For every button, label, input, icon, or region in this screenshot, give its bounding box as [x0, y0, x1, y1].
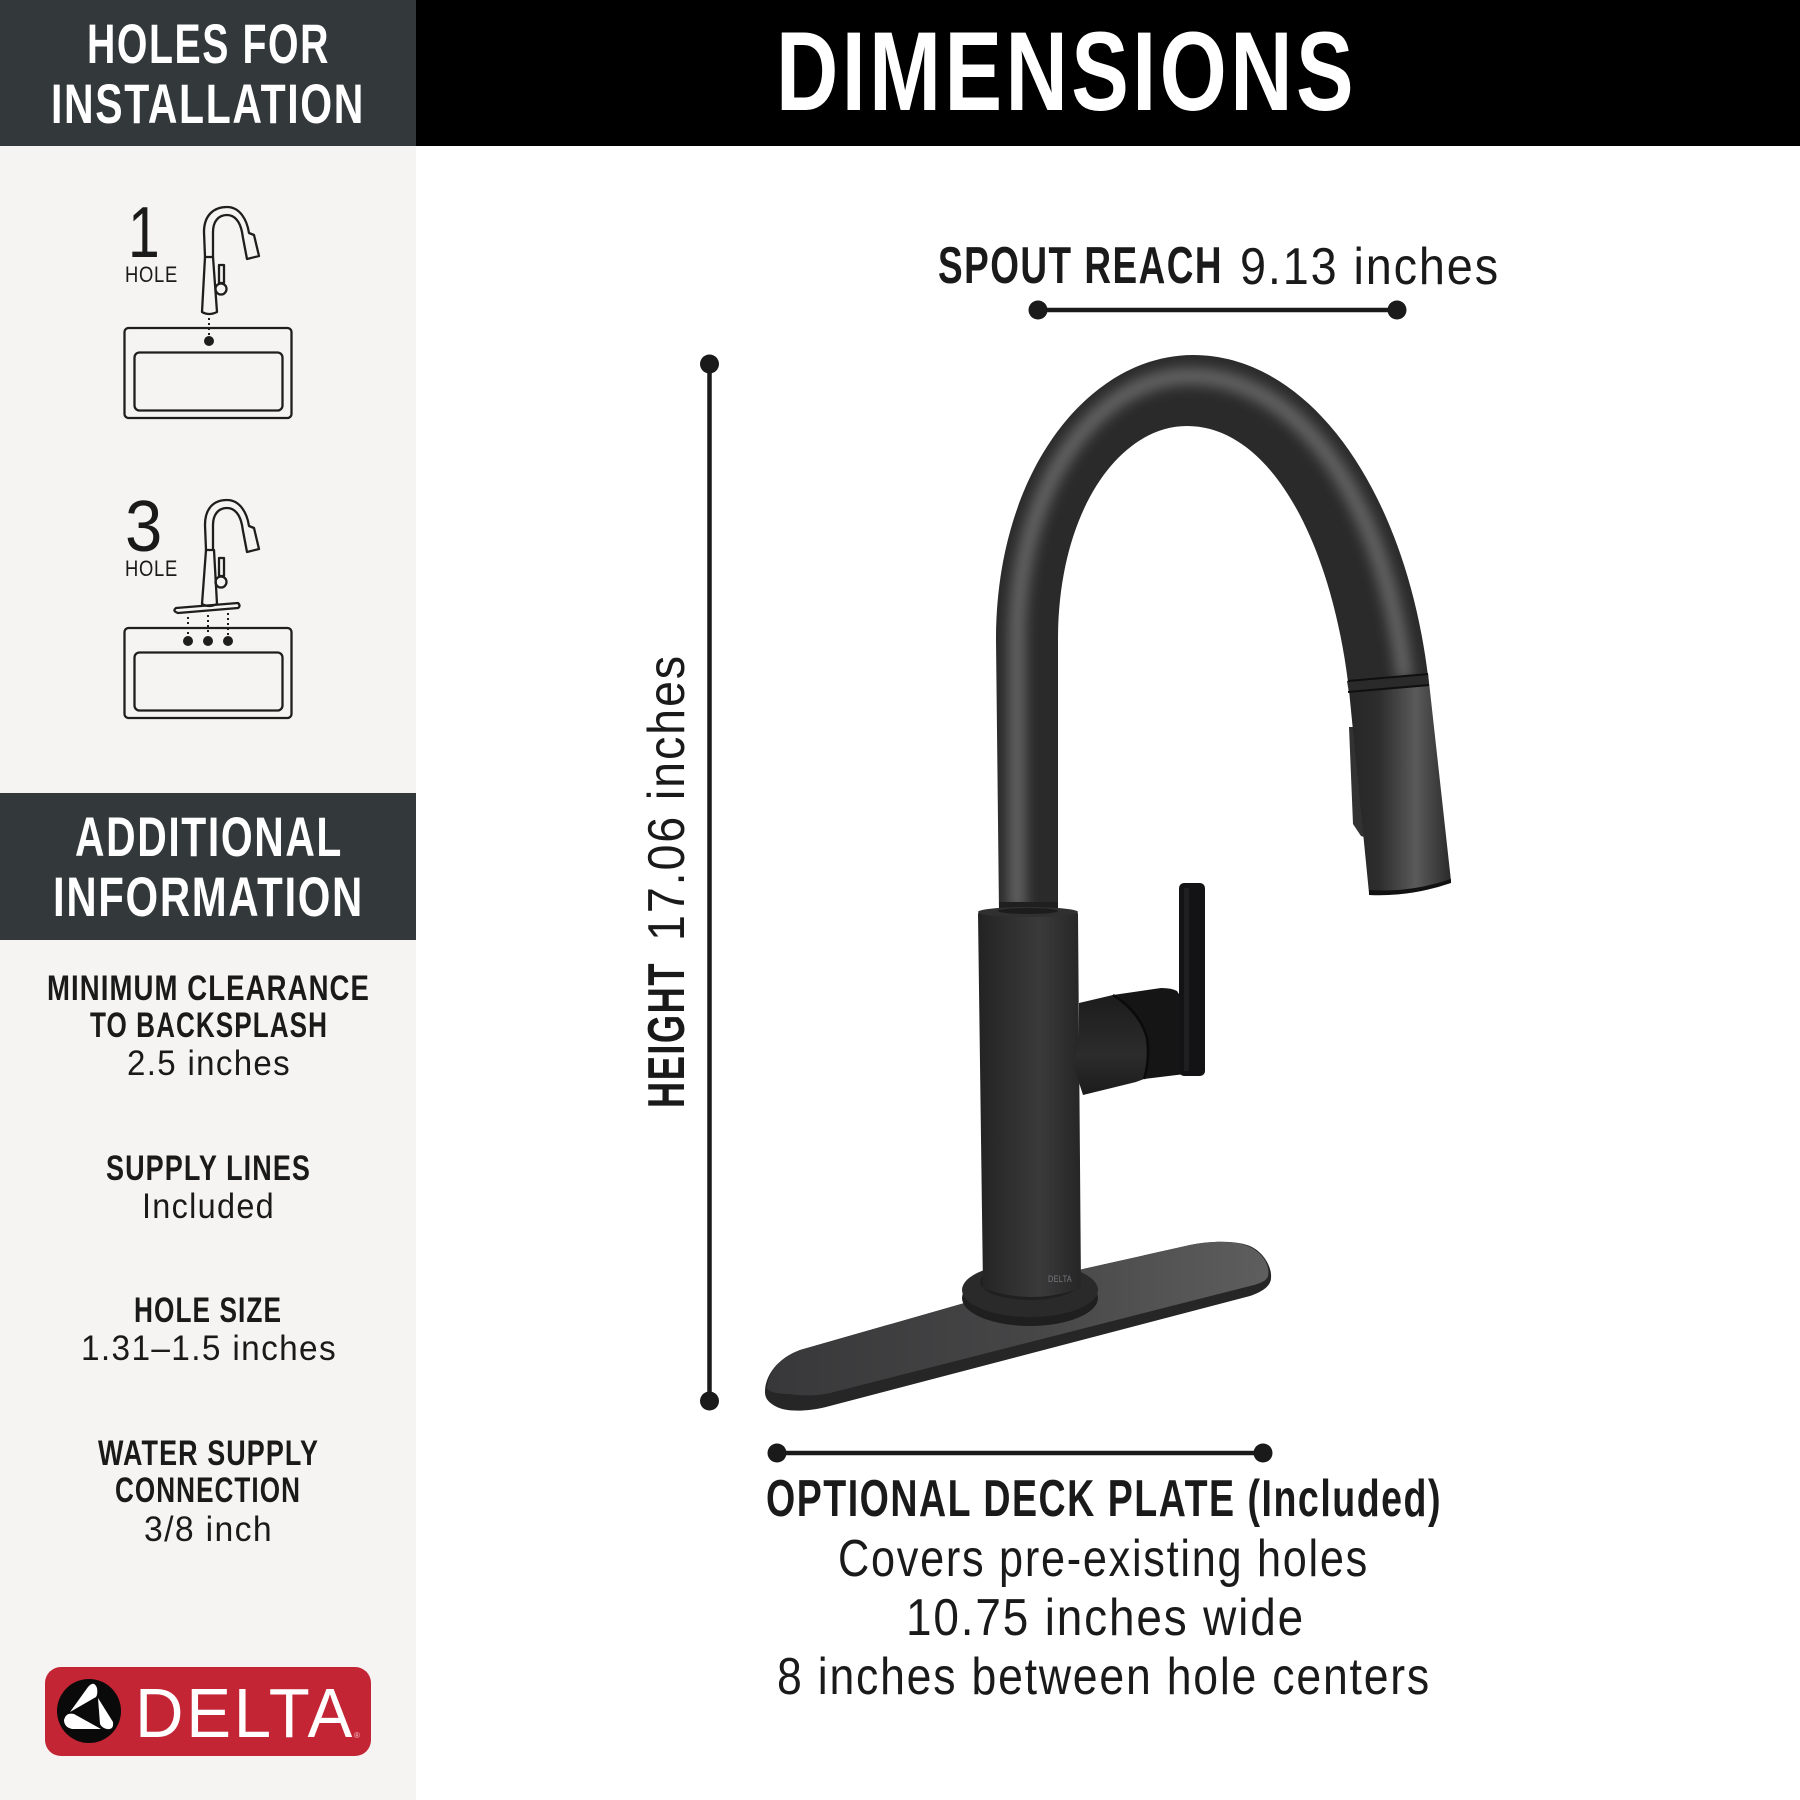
faucet pull-down head [1347, 673, 1451, 895]
info: hole size: 1.31–1.5 inches [81, 1329, 337, 1368]
info: supply lines: SUPPLY LINES [106, 1149, 311, 1188]
header bar: additional information: INFORMATION [53, 865, 364, 928]
icon: three hole installation [124, 487, 292, 718]
faucet deck plate [765, 1242, 1271, 1411]
header bar: additional information: ADDITIONAL [75, 805, 343, 868]
info: supply lines: Included [142, 1187, 275, 1226]
deck plate dimension: OPTIONAL DECK PLATE (Included) [766, 1470, 1442, 1528]
icon: one hole installation [124, 193, 292, 418]
deck plate dimension: 10.75 inches wide [906, 1589, 1305, 1647]
sidebar background [0, 146, 416, 1800]
header bar: additional information [0, 793, 416, 940]
faucet handle [1074, 883, 1205, 1095]
height dimension [638, 354, 719, 1410]
info: hole size [81, 1291, 337, 1368]
logo: Delta: DELTA [135, 1674, 355, 1752]
info: water supply connection [98, 1434, 319, 1549]
info: minimum clearance [47, 969, 370, 1083]
icon: one hole installation: 1 [128, 193, 162, 273]
info: supply lines [106, 1149, 311, 1226]
header bar: holes for installation: HOLES FOR [87, 12, 330, 75]
info: minimum clearance: TO BACKSPLASH [90, 1006, 328, 1045]
info: minimum clearance: MINIMUM CLEARANCE [47, 969, 370, 1008]
spout reach dimension: SPOUT REACH [938, 237, 1223, 295]
height dimension: 17.06 inches [638, 654, 696, 941]
info: minimum clearance: 2.5 inches [127, 1044, 291, 1083]
icon: three hole installation: 3 [125, 487, 165, 567]
header bar: dimensions title: DIMENSIONS [776, 9, 1357, 134]
faucet body: DELTA [1048, 1274, 1072, 1284]
faucet spout [996, 355, 1428, 908]
header bar: dimensions title [416, 0, 1800, 146]
height dimension: HEIGHT [638, 962, 696, 1108]
spout reach dimension [938, 237, 1500, 320]
info: water supply connection: 3/8 inch [144, 1510, 273, 1549]
info: water supply connection: CONNECTION [115, 1471, 301, 1510]
icon: one hole installation: HOLE [125, 262, 178, 287]
info: water supply connection: WATER SUPPLY [98, 1434, 319, 1473]
spout reach dimension: 9.13 inches [1240, 238, 1500, 296]
deck plate dimension: Covers pre-existing holes [838, 1530, 1369, 1588]
deck plate dimension: 8 inches between hole centers [777, 1648, 1431, 1706]
header bar: holes for installation [0, 0, 416, 146]
faucet flange [962, 1263, 1098, 1326]
info: hole size: HOLE SIZE [134, 1291, 282, 1330]
header bar: holes for installation: INSTALLATION [51, 72, 365, 135]
faucet body [978, 907, 1081, 1297]
faucet illustration [765, 340, 1451, 1411]
icon: three hole installation: HOLE [125, 556, 178, 581]
deck plate dimension [766, 1444, 1442, 1706]
logo: Delta: ® [354, 1731, 360, 1740]
faucet spout collar [999, 902, 1058, 913]
logo: Delta [45, 1667, 371, 1756]
